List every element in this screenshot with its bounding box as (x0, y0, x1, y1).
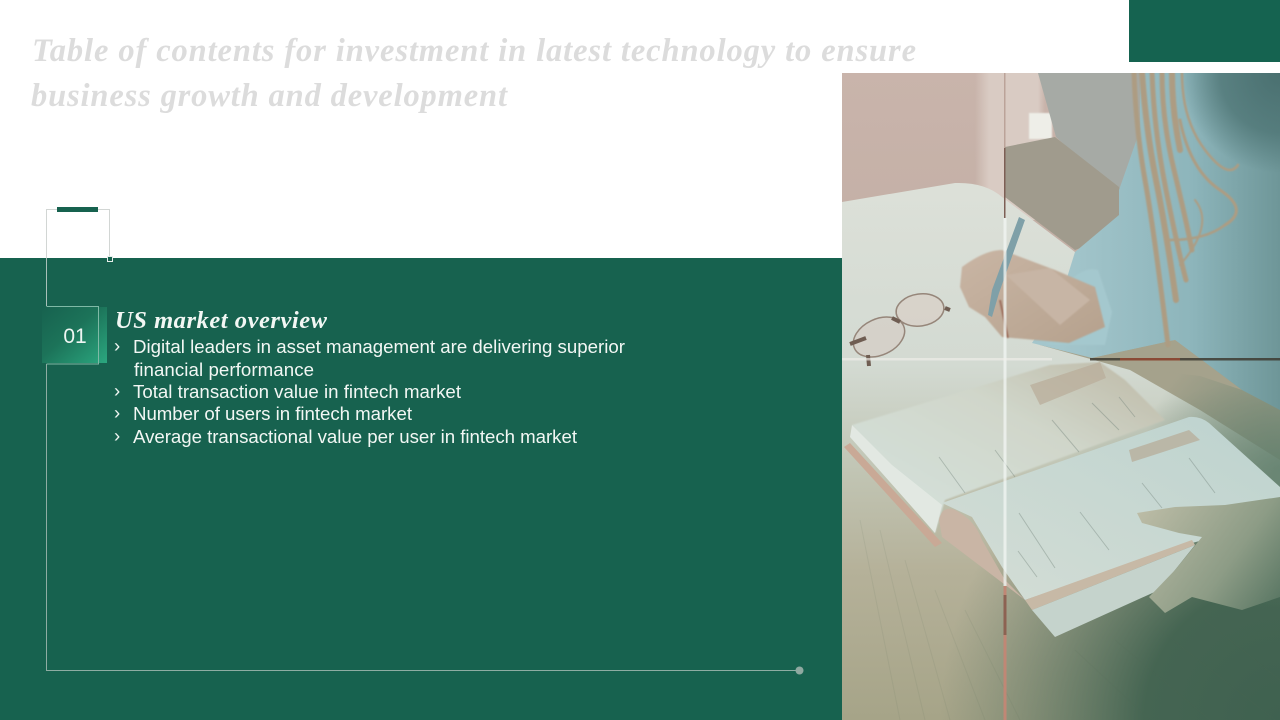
number badge 01: 01 (63, 325, 87, 348)
writing hand (960, 250, 1105, 343)
frame line with end dot (46, 207, 804, 674)
vertical light line (1004, 73, 1006, 720)
title: Table of contents for investment in latest technology to ensure (32, 33, 916, 69)
bullet list: Digital leaders in asset management are delivering superior (133, 336, 625, 357)
bullet list: › (114, 425, 120, 446)
sofa (1005, 73, 1150, 250)
bullet list: › (114, 380, 120, 401)
bullet list (114, 335, 625, 447)
bullet list: › (114, 335, 120, 356)
lower hand (1137, 497, 1280, 613)
green content panel (0, 258, 842, 720)
glasses (847, 291, 950, 366)
photo: person writing in a notebook at a table (842, 73, 1280, 720)
title (31, 33, 916, 114)
bullet list: Total transaction value in fintech market (133, 381, 462, 402)
top-right green accent block (1129, 0, 1280, 62)
sweater (1032, 73, 1280, 410)
table surface (842, 183, 1280, 720)
wall and window (842, 73, 1079, 252)
bullet list: › (114, 402, 120, 423)
section heading: US market overview (115, 307, 328, 334)
pen (988, 217, 1025, 317)
bullet list: Average transactional value per user in fintech market (133, 426, 578, 447)
number badge 01 (42, 306, 107, 364)
wood grain (860, 520, 975, 718)
horizontal light line (842, 358, 1280, 360)
hair (1134, 73, 1238, 345)
title: business growth and development (31, 78, 508, 114)
bullet list: Number of users in fintech market (133, 403, 413, 424)
open notebook (844, 362, 1280, 637)
bullet list: financial performance (134, 359, 314, 380)
section content (114, 307, 625, 447)
